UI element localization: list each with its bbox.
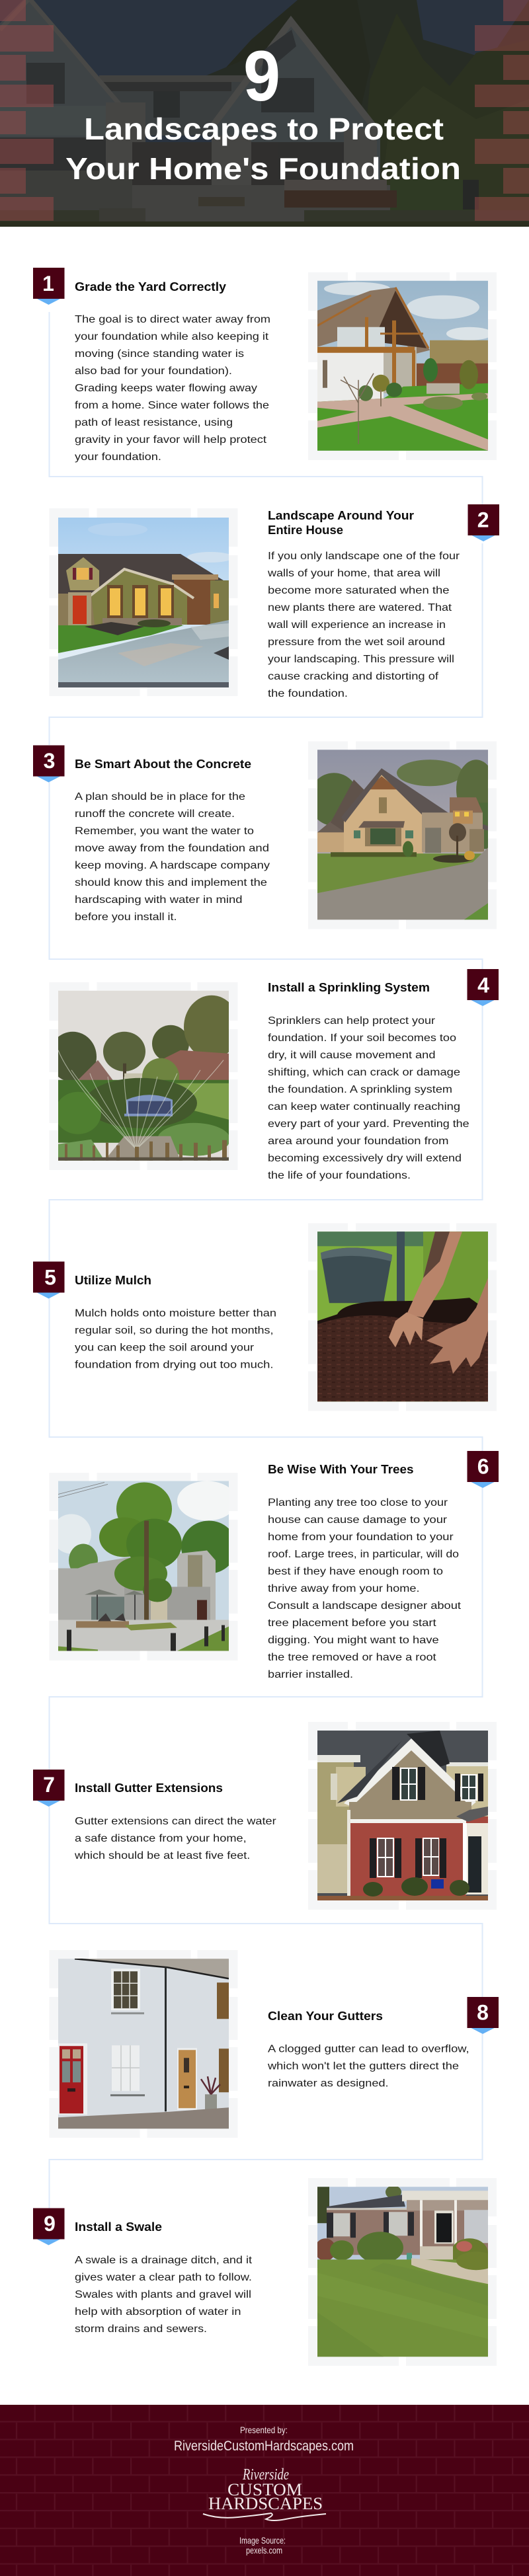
body text: which won't let the gutters direct the xyxy=(267,2061,459,2072)
heading: Entire House xyxy=(268,523,343,537)
badge 7 xyxy=(33,1770,65,1807)
photo: olive house with wet driveway xyxy=(58,518,229,687)
image source: Image Source: xyxy=(239,2535,286,2546)
body text: A plan should be in place for the xyxy=(75,791,245,802)
body text: A swale is a drainage ditch, and it xyxy=(75,2255,253,2266)
badge 9: 9 xyxy=(44,2212,56,2236)
photo frame xyxy=(49,508,238,696)
body text: from a home. Since water follows the xyxy=(75,400,269,411)
body text: Remember, you want the water to xyxy=(75,826,254,837)
badge 6 xyxy=(467,1451,499,1488)
panel: step 3 concrete xyxy=(33,742,497,929)
body text xyxy=(75,791,270,923)
body text: your foundation. xyxy=(75,451,161,463)
body text: Planting any tree too close to your xyxy=(268,1497,448,1508)
body text: roof. Large trees, in particular, will do xyxy=(268,1549,459,1560)
photo: modern house with tree xyxy=(58,1481,229,1651)
photo: hands in mulch xyxy=(317,1231,488,1401)
body text: regular soil, so during the hot months, xyxy=(75,1325,274,1337)
badge 2: 2 xyxy=(477,508,489,531)
body text: pressure from the wet soil around xyxy=(268,637,445,648)
badge 4 xyxy=(467,969,499,1006)
body text: the tree removed or have a root xyxy=(268,1652,436,1663)
heading: Utilize Mulch xyxy=(75,1273,151,1287)
body text xyxy=(74,1816,276,1861)
body text: new plants there are watered. That xyxy=(268,602,452,613)
body text: the foundation. A sprinkling system xyxy=(268,1084,452,1095)
panel: step 5 mulch xyxy=(33,1223,497,1411)
body text: moving (since standing water is xyxy=(75,348,244,360)
heading: Install a Sprinkling System xyxy=(268,980,430,994)
panel: step 1 grade the yard xyxy=(33,268,497,463)
heading: Clean Your Gutters xyxy=(268,2009,383,2023)
image source xyxy=(239,2535,286,2556)
connector path between steps xyxy=(49,312,483,2208)
badge 5: 5 xyxy=(44,1265,56,1289)
badge 1: 1 xyxy=(42,272,54,295)
body text: home from your foundation to your xyxy=(268,1532,454,1543)
logo: CUSTOM xyxy=(227,2480,302,2499)
body text xyxy=(267,2044,469,2089)
photo: white terraced houses xyxy=(58,1959,229,2128)
photo frame xyxy=(308,1223,497,1411)
body text: house can cause damage to your xyxy=(268,1514,448,1526)
title: Landscapes to Protect xyxy=(84,112,444,146)
body text: best if they have enough room to xyxy=(268,1566,443,1577)
body text: Grading keeps water flowing away xyxy=(75,383,257,394)
badge 4: 4 xyxy=(477,973,489,997)
badge 3 xyxy=(33,746,65,783)
body text: A clogged gutter can lead to overflow, xyxy=(268,2044,469,2054)
body text xyxy=(75,1308,276,1371)
body text: path of least resistance, using xyxy=(75,417,233,428)
title: Your Home's Foundation xyxy=(65,151,461,186)
photo frame xyxy=(308,272,497,460)
body text: foundation. If your soil becomes too xyxy=(268,1033,456,1044)
body text: runoff the concrete will create. xyxy=(75,808,235,820)
footer brick background xyxy=(0,2405,529,2576)
body text: foundation from drying out too much. xyxy=(75,1359,274,1371)
website: RiversideCustomHardscapes.com xyxy=(174,2439,354,2454)
heading xyxy=(268,508,414,537)
body text xyxy=(75,2255,253,2335)
panel: step 2 landscape around house xyxy=(49,504,499,699)
body text: Gutter extensions can direct the water xyxy=(75,1816,276,1827)
body text: which should be at least five feet. xyxy=(74,1850,250,1861)
body text: should know this and implement the xyxy=(75,877,267,888)
body text: every part of your yard. Preventing the xyxy=(268,1118,469,1130)
badge 3: 3 xyxy=(44,749,55,773)
body text: Mulch holds onto moisture better than xyxy=(75,1308,276,1319)
body text xyxy=(75,314,270,463)
image source: pexels.com xyxy=(246,2545,282,2556)
body text: The goal is to direct water away from xyxy=(75,314,270,325)
body text xyxy=(267,551,460,699)
body text: rainwater as designed. xyxy=(268,2078,389,2089)
body text: thrive away from your home. xyxy=(268,1583,420,1594)
body text: storm drains and sewers. xyxy=(75,2323,207,2335)
body text: your landscaping. This pressure will xyxy=(268,654,454,665)
badge 1 xyxy=(33,268,65,305)
badge 6: 6 xyxy=(477,1454,489,1478)
body text: walls of your home, that area will xyxy=(267,568,440,579)
body text: become more saturated when the xyxy=(268,585,450,596)
photo frame xyxy=(308,2178,497,2366)
photo: front lawn and porch xyxy=(317,2187,488,2357)
body text: a safe distance from your home, xyxy=(75,1833,247,1844)
photo frame xyxy=(49,1950,238,2138)
body text: the life of your foundations. xyxy=(268,1170,411,1181)
body text: gives water a clear path to follow. xyxy=(75,2272,252,2283)
photo frame xyxy=(49,982,238,1170)
heading: Be Wise With Your Trees xyxy=(268,1462,414,1476)
badge 5 xyxy=(33,1261,65,1298)
body text: hardscaping with water in mind xyxy=(75,894,242,906)
body text: also bad for your foundation). xyxy=(75,366,232,377)
heading: Install Gutter Extensions xyxy=(75,1781,223,1795)
body text: shifting, which can crack or damage xyxy=(268,1067,460,1078)
body text: you can keep the soil around your xyxy=(75,1342,255,1354)
photo: sprinkler in garden xyxy=(58,990,229,1161)
badge 7: 7 xyxy=(43,1773,55,1797)
decorative brick columns xyxy=(0,0,529,221)
badge 9 xyxy=(33,2208,65,2245)
header background photo: house at dusk xyxy=(0,0,529,227)
body text: help with absorption of water in xyxy=(75,2306,241,2318)
header banner xyxy=(0,0,529,227)
body text: dry, it will cause movement and xyxy=(268,1050,435,1061)
body text: Sprinklers can help protect your xyxy=(268,1015,436,1027)
body text: area around your foundation from xyxy=(268,1136,448,1147)
body text: your foundation while also keeping it xyxy=(75,331,269,342)
body text: digging. You might want to have xyxy=(268,1635,439,1646)
panel: step 4 sprinkling system xyxy=(49,969,499,1181)
heading: Grade the Yard Correctly xyxy=(75,280,227,293)
body text: can keep water continually reaching xyxy=(268,1101,460,1112)
body text: If you only landscape one of the four xyxy=(268,551,460,562)
body text xyxy=(268,1497,462,1680)
heading: Landscape Around Your xyxy=(268,508,414,522)
body text: barrier installed. xyxy=(268,1669,353,1680)
badge 8: 8 xyxy=(477,2000,489,2024)
logo: Riverside xyxy=(242,2466,289,2483)
badge 8 xyxy=(467,1997,499,2034)
presented by: Presented by: xyxy=(240,2425,288,2435)
panel: step 9 swale xyxy=(33,2178,497,2366)
body text: cause cracking and distorting of xyxy=(268,671,439,682)
panel: step 6 trees xyxy=(49,1451,499,1680)
panel: step 8 clean gutters xyxy=(49,1950,499,2138)
logo: HARDSCAPES xyxy=(208,2494,323,2513)
body text: move away from the foundation and xyxy=(75,843,269,854)
body text: before you install it. xyxy=(75,912,177,923)
logo xyxy=(203,2466,326,2520)
photo: brick and siding house xyxy=(317,1731,488,1900)
heading: Install a Swale xyxy=(75,2220,162,2234)
title: 9 xyxy=(243,36,280,116)
photo frame xyxy=(308,1722,497,1910)
body text: the foundation. xyxy=(268,688,348,699)
body text: gravity in your favor will help protect xyxy=(75,434,267,446)
photo frame xyxy=(308,742,497,929)
photo: brick house with driveway xyxy=(317,750,488,920)
title xyxy=(65,36,461,186)
footer xyxy=(0,2405,529,2576)
body text xyxy=(268,1015,469,1181)
body text: Consult a landscape designer about xyxy=(268,1600,462,1612)
photo frame xyxy=(49,1473,238,1660)
body text: wall will experience an increase in xyxy=(267,619,446,631)
photo: timber house with lawn xyxy=(317,280,488,451)
badge 2 xyxy=(468,504,499,541)
body text: keep moving. A hardscape company xyxy=(75,860,270,871)
body text: becoming excessively dry will extend xyxy=(268,1153,462,1164)
heading: Be Smart About the Concrete xyxy=(75,757,251,771)
body text: Swales with plants and gravel will xyxy=(75,2289,251,2300)
body text: tree placement before you start xyxy=(268,1618,436,1629)
panel: step 7 gutter extensions xyxy=(33,1722,497,1910)
